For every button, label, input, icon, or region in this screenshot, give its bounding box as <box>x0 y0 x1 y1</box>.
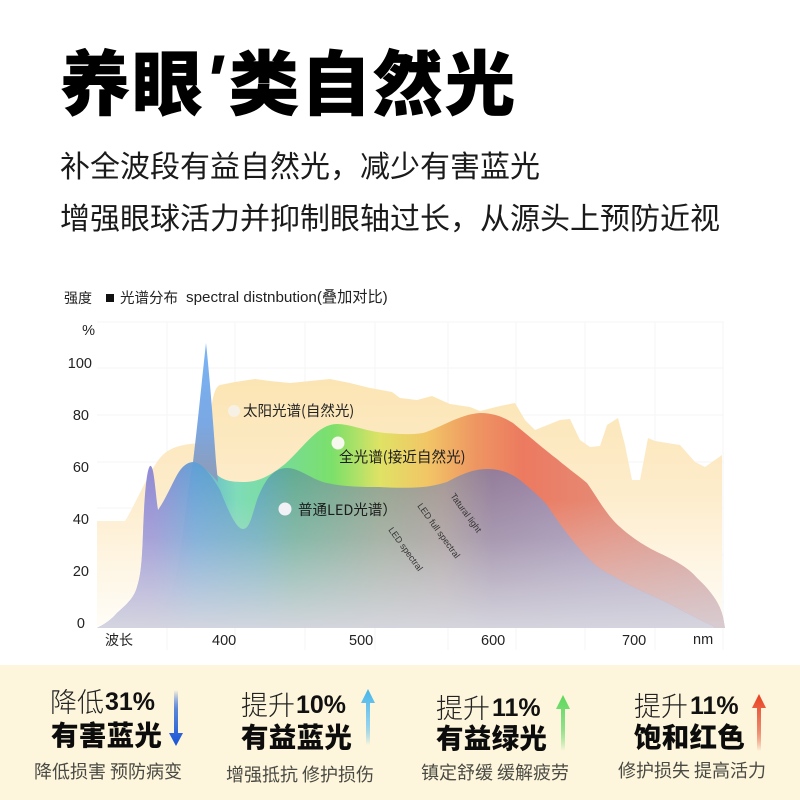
x axis labels: nm <box>693 632 713 648</box>
curve label: LED full spectral: LED full spectral <box>415 501 462 560</box>
area: blue spike <box>193 343 218 482</box>
stat: beneficial blue light: 提升 <box>241 684 295 723</box>
legend: sunlight: 太阳光谱(自然光) <box>243 400 354 421</box>
y axis labels: 40 <box>73 512 89 528</box>
stat: saturated red: 修护损失 提高活力 <box>618 757 766 783</box>
y axis labels: 80 <box>73 408 89 424</box>
chart heading: 强度 <box>64 288 92 308</box>
subtitle line 1: 补全波段有益自然光，减少有害蓝光 <box>60 142 540 186</box>
stat: harmful blue light: 31% <box>105 688 155 716</box>
stat: beneficial blue light <box>226 684 375 787</box>
stat: beneficial blue light: 增强抵抗 修护损伤 <box>226 761 374 787</box>
panel: bottom stats <box>0 665 800 800</box>
stat: beneficial blue light: 有益蓝光 <box>241 715 352 755</box>
x axis labels: 600 <box>481 633 505 649</box>
stat: saturated red: 饱和红色 <box>634 715 745 755</box>
title <box>60 29 517 130</box>
area: sunlight spectrum <box>97 379 722 628</box>
stat: beneficial green light: 有益绿光 <box>436 716 547 756</box>
stat: beneficial green light: 11% <box>492 694 541 722</box>
x axis labels: 波长 <box>105 630 133 650</box>
area: LED spectrum <box>97 462 715 628</box>
stat: harmful blue light: 有害蓝光 <box>51 713 162 753</box>
legend: full spectrum: 全光谱(接近自然光) <box>339 446 466 467</box>
stat: beneficial green light: 提升 <box>436 687 490 726</box>
stat: beneficial green light <box>421 687 570 785</box>
grid lines <box>97 322 724 650</box>
y axis labels: 20 <box>73 564 89 580</box>
title: 养眼 <box>60 29 204 130</box>
y axis labels: % <box>82 323 95 339</box>
x axis labels: 500 <box>349 633 373 649</box>
x axis labels <box>105 630 713 650</box>
y axis labels: 60 <box>73 460 89 476</box>
legend: LED: 普通LED光谱） <box>298 499 397 520</box>
stat: saturated red: 提升 <box>634 685 688 724</box>
curve label: LED spectral: LED spectral <box>386 525 425 573</box>
stat: harmful blue light: 降低 <box>50 681 104 720</box>
subtitle line 2: 增强眼球活力并抑制眼轴过长，从源头上预防近视 <box>60 194 720 238</box>
chart heading <box>64 287 388 308</box>
chart heading: spectral distnbution(叠加对比) <box>186 289 388 306</box>
stat: beneficial blue light: 10% <box>296 691 346 719</box>
y axis labels <box>68 323 95 632</box>
x axis labels: 400 <box>212 633 236 649</box>
title: 类自然光 <box>229 29 517 130</box>
stat: harmful blue light: 降低损害 预防病变 <box>34 758 182 784</box>
y axis labels: 100 <box>68 356 92 372</box>
stat: saturated red: 11% <box>690 692 739 720</box>
stat: saturated red <box>618 685 766 783</box>
stat: harmful blue light <box>34 681 183 784</box>
area: full spectrum <box>130 413 725 628</box>
y axis labels: 0 <box>77 616 85 632</box>
title: ' <box>198 41 233 119</box>
curve label: Tatural light: Tatural light <box>448 491 484 535</box>
chart heading: 光谱分布 <box>120 287 178 308</box>
legend: full spectrum <box>332 436 466 467</box>
stat: beneficial green light: 镇定舒缓 缓解疲劳 <box>421 759 569 785</box>
x axis labels: 700 <box>622 633 646 649</box>
